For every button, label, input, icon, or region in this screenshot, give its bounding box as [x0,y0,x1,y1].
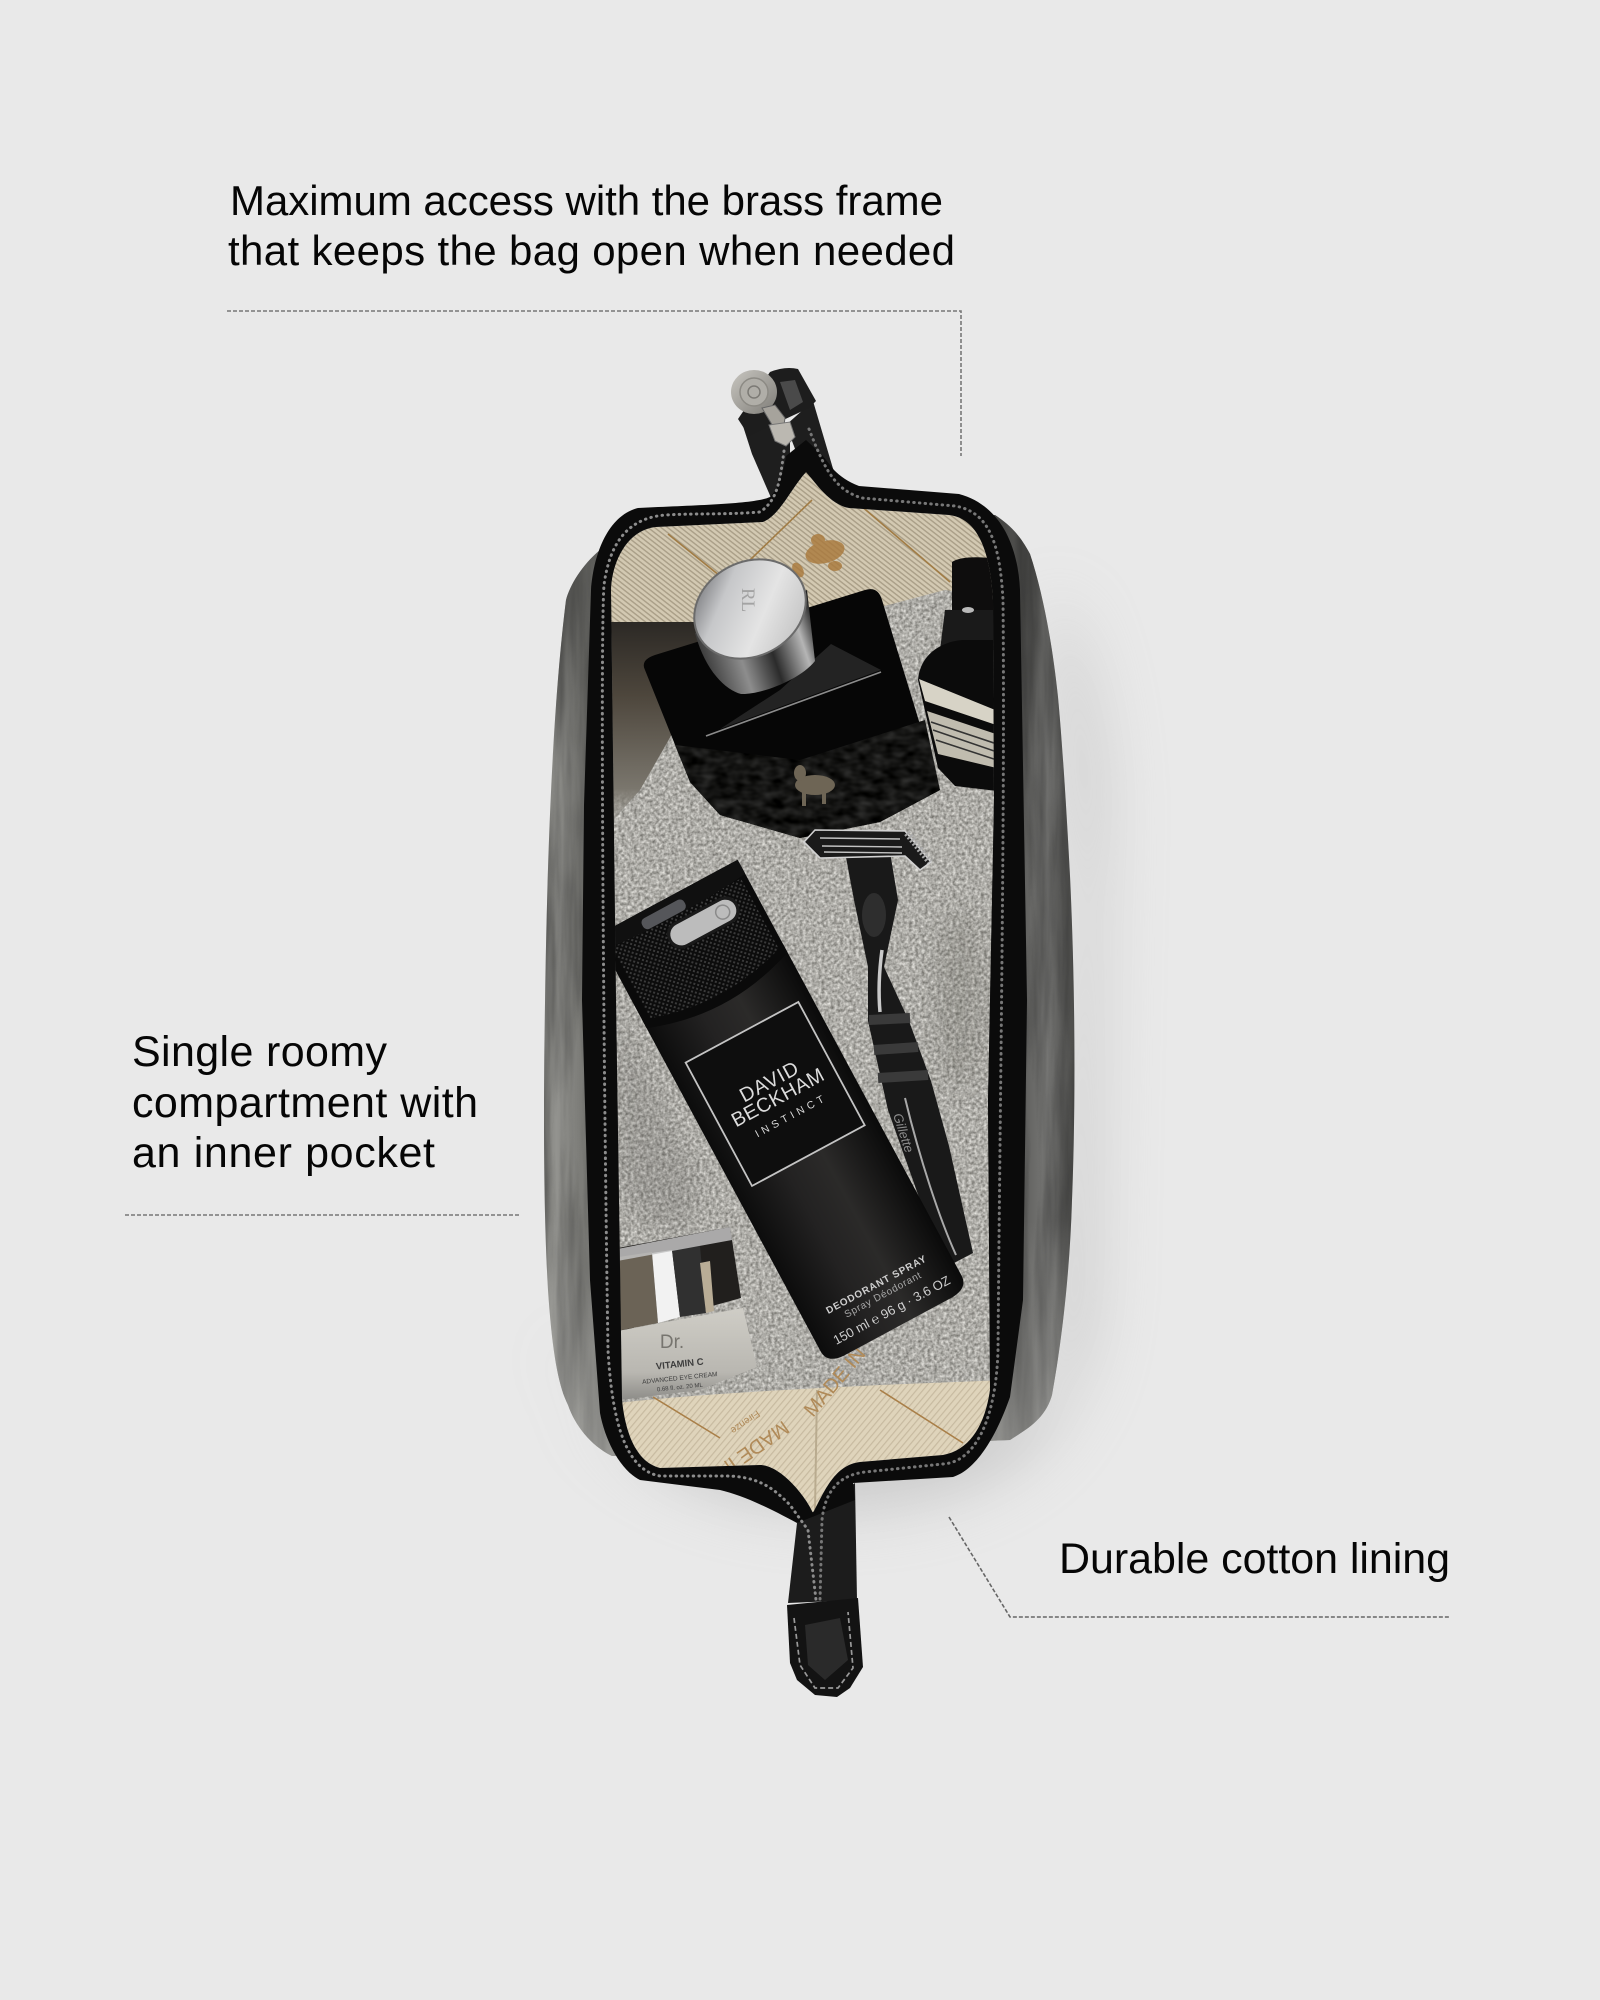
cream jar [612,1227,757,1400]
razor [804,830,973,1263]
razor brand: Gillette [890,1111,917,1154]
soft shadow under bag [560,590,1105,1511]
can label square [686,1002,865,1186]
razor handle [845,852,973,1263]
knit cloth [675,720,940,838]
bottom lining: MADE IN [800,1343,870,1421]
callout text: compartment: an inner pocket [132,1129,435,1177]
can body [642,943,969,1364]
bottle cap [693,558,807,660]
top lining [611,472,993,622]
callout: compartment [125,1028,519,1215]
jar label: ADVANCED EYE CREAM [642,1371,718,1386]
can legal text: Spray Déodorant [843,1270,924,1321]
jar label: Dr. [660,1332,684,1353]
lining emblem [792,534,844,578]
bottom lining [622,1348,990,1512]
shadowed lining left [612,622,698,818]
can label text: BECKHAM [728,1064,829,1132]
zipper teeth [602,429,1003,1600]
aesop bottle [918,557,994,791]
bottom lining: Firenze [728,1408,762,1436]
callout text: compartment: compartment with [132,1079,478,1127]
callout: cotton lining [949,1517,1450,1617]
cap monogram: RL [737,588,758,612]
can legal text: DEODORANT SPRAY [824,1254,929,1317]
top zipper tab [731,368,834,500]
leather body [544,515,1074,1456]
callout text: brass frame: Maximum access with the brass frame [230,177,943,224]
razor head [804,830,931,870]
can label text: INSTINCT [753,1091,830,1140]
can legal text: 150 ml ℮ 96 g · 3.6 OZ [830,1273,953,1348]
leader line: compartment [125,1214,519,1216]
jar label: VITAMIN C [655,1357,704,1372]
interior contents [597,460,1010,1520]
callout: brass frame [227,177,961,456]
callout text: cotton lining: Durable cotton lining [1059,1535,1450,1583]
leather tab [787,1598,863,1697]
can cap [615,860,788,1028]
zipper pull [731,370,795,446]
can label text: DAVID [736,1057,803,1107]
lining print text: MADE IN [712,1416,793,1482]
jar label: 0.68 fl. oz. 20 ML [657,1383,704,1393]
callout text: compartment: Single roomy [132,1028,388,1076]
toiletry bag [544,368,1074,1697]
leader line: brass frame [227,311,961,456]
towel [600,560,1010,1420]
perfume bottle [644,540,940,838]
deodorant can [597,860,969,1364]
jar label [642,1332,718,1393]
bottom zipper tab [787,1483,863,1697]
infographic canvas [125,184,1449,1697]
polo logo [794,765,835,806]
callout text: brass frame: that keeps the bag open when needed [228,227,955,274]
leader line: cotton lining [949,1517,1449,1617]
bottle collar [695,590,815,694]
brass frame band [582,440,1027,1523]
